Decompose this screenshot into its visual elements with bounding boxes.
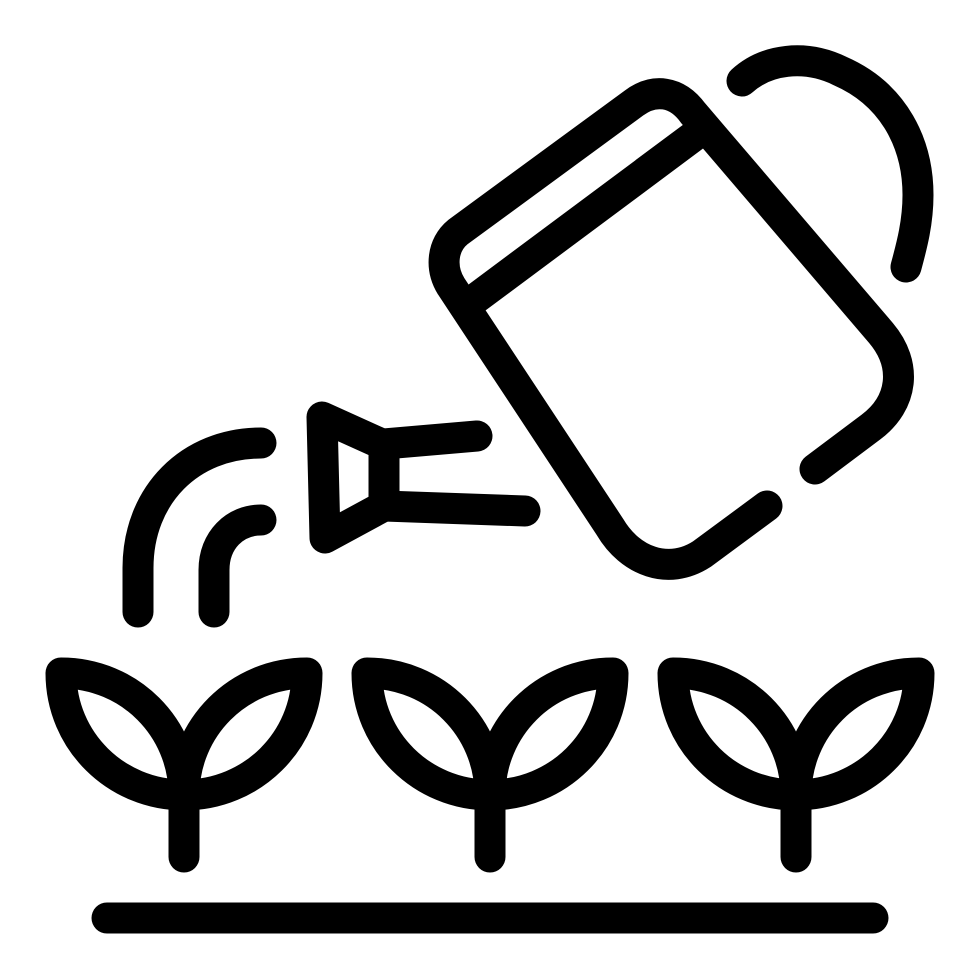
plant left [61,673,307,857]
plant right [673,673,919,857]
watering can spout [322,417,525,538]
water streams [138,443,261,612]
plant middle [367,673,613,857]
ground line [107,902,873,934]
watering can body [444,94,898,564]
watering can handle [742,61,918,267]
